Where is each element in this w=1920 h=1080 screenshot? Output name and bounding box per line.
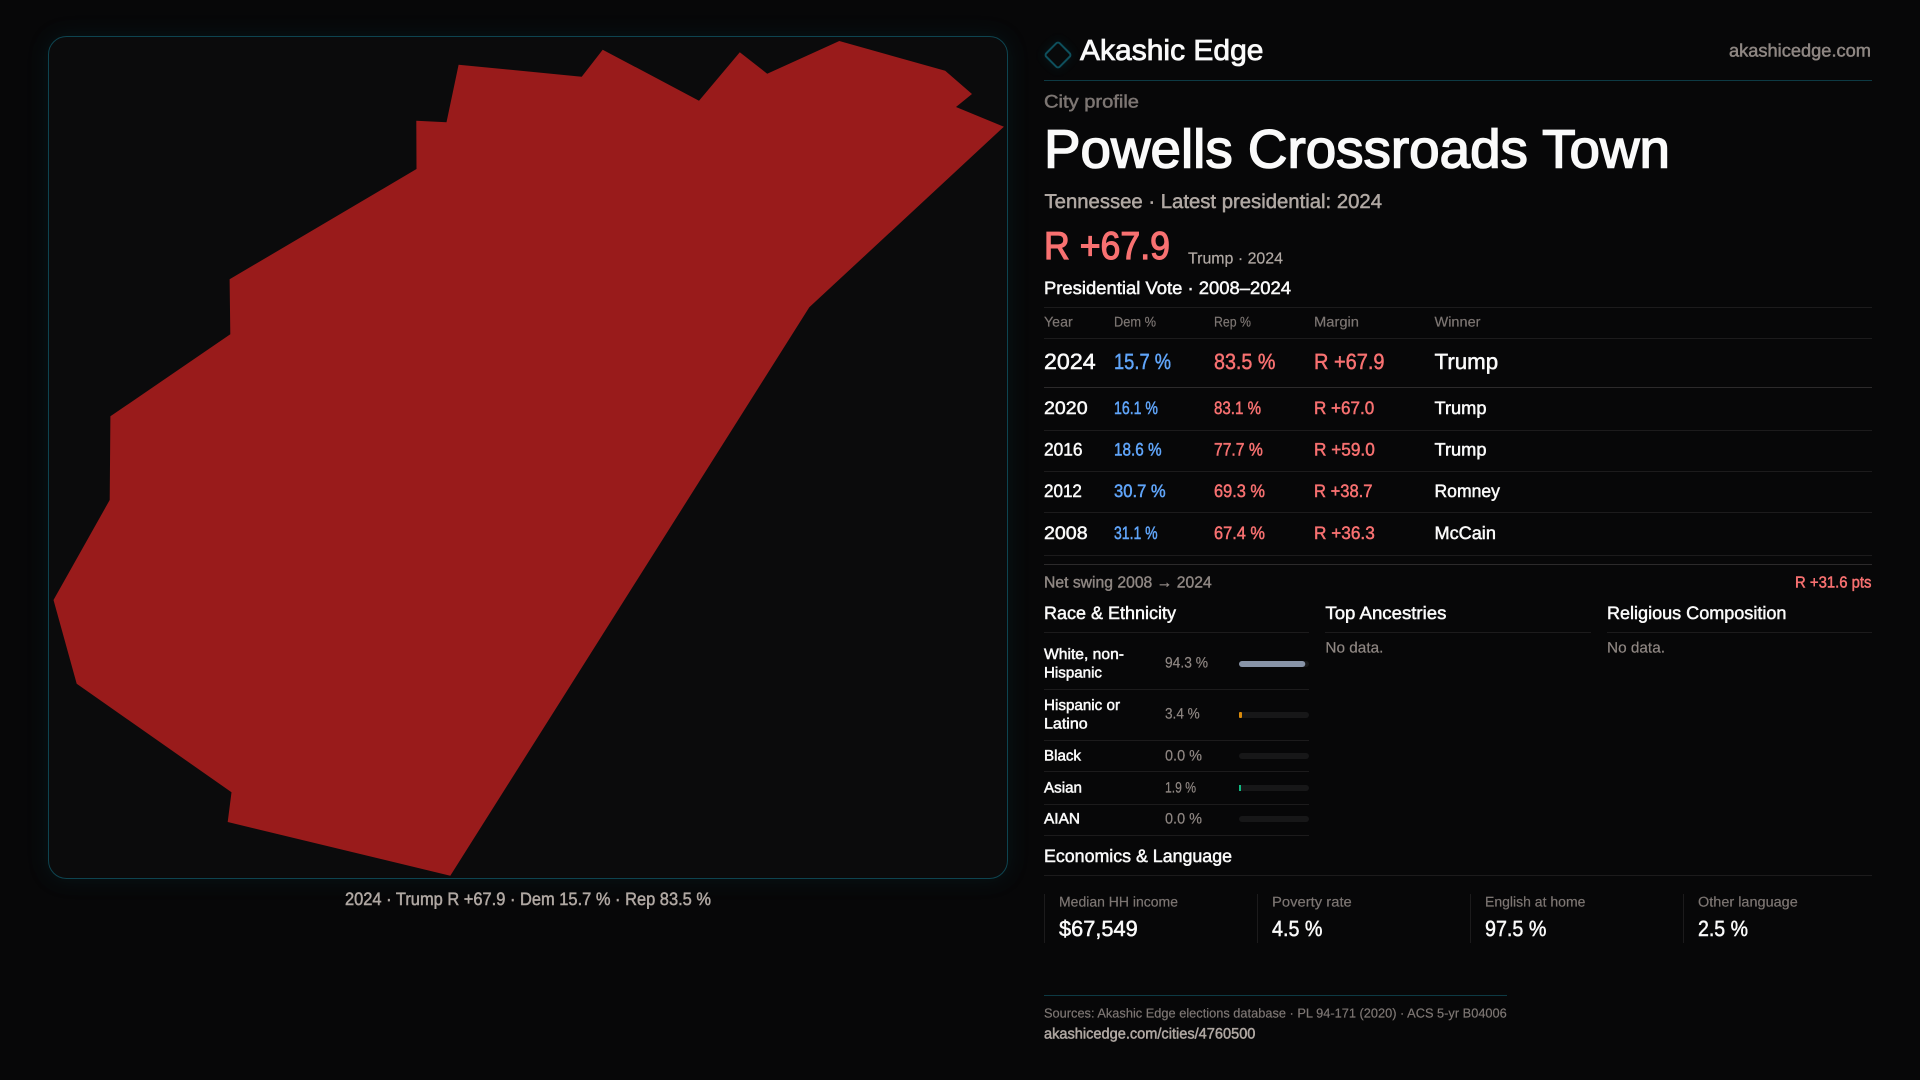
row 2024 bbox=[1044, 349, 1498, 374]
row 2024: 2024 bbox=[1044, 349, 1096, 374]
row 2008: 31.1 % bbox=[1114, 523, 1158, 543]
footer bbox=[1044, 996, 1507, 1042]
header bbox=[1044, 35, 1872, 80]
row 2024: 15.7 % bbox=[1114, 349, 1171, 374]
row 2012: R +38.7 bbox=[1314, 481, 1372, 501]
page url: akashicedge.com/cities/4760500 bbox=[1044, 1026, 1255, 1042]
icon: brand diamond bbox=[1044, 41, 1072, 69]
subtitle: Tennessee · Latest presidential: 2024 bbox=[1044, 191, 1382, 213]
table header bbox=[1044, 314, 1481, 330]
row: asian bbox=[1044, 780, 1309, 796]
row 2016: R +59.0 bbox=[1314, 440, 1375, 460]
panel: top ancestries bbox=[1325, 603, 1591, 656]
row: hispanic or latino: 3.4 % bbox=[1165, 706, 1200, 722]
row 2008: 2008 bbox=[1044, 523, 1088, 543]
row 2012 bbox=[1044, 481, 1500, 501]
row 2020 bbox=[1044, 398, 1486, 418]
panel: religious composition bbox=[1607, 603, 1872, 656]
net swing: R +31.6 pts bbox=[1795, 574, 1872, 592]
panel: map bbox=[48, 36, 1008, 879]
stat: other language bbox=[1684, 894, 1798, 943]
heading: top ancestries: Top Ancestries bbox=[1325, 603, 1446, 623]
eyebrow: City profile bbox=[1044, 92, 1139, 112]
row: white non-hispanic: 94.3 % bbox=[1165, 654, 1208, 672]
row 2016: 2016 bbox=[1044, 440, 1082, 460]
row 2020: 83.1 % bbox=[1214, 398, 1261, 418]
stat: english at home: English at home bbox=[1485, 894, 1586, 910]
net swing bbox=[1044, 574, 1872, 592]
row: hispanic or latino: Hispanic or bbox=[1044, 697, 1120, 714]
row 2008: McCain bbox=[1434, 523, 1496, 543]
row 2020: 2020 bbox=[1044, 398, 1088, 418]
row 2024: Trump bbox=[1434, 349, 1498, 374]
row: aian bbox=[1044, 810, 1309, 828]
stat: median income: Median HH income bbox=[1059, 894, 1178, 910]
row 2020: Trump bbox=[1434, 398, 1486, 418]
row: white non-hispanic bbox=[1044, 646, 1309, 682]
headline margin note: Trump · 2024 bbox=[1188, 250, 1283, 268]
brand name: Akashic Edge bbox=[1080, 35, 1264, 67]
table header: Year bbox=[1044, 314, 1073, 330]
row: aian: AIAN bbox=[1044, 810, 1080, 828]
row 2016: 18.6 % bbox=[1114, 440, 1162, 460]
map: city boundary shape bbox=[54, 41, 1004, 876]
site url: akashicedge.com bbox=[1729, 40, 1871, 60]
panel: economics and language bbox=[1044, 846, 1872, 943]
row: asian: 1.9 % bbox=[1165, 780, 1196, 796]
stat: poverty rate: 4.5 % bbox=[1272, 916, 1322, 941]
row 2016: Trump bbox=[1434, 440, 1486, 460]
row 2016: 77.7 % bbox=[1214, 440, 1263, 460]
row: black: Black bbox=[1044, 748, 1081, 764]
net swing: Net swing 2008 → 2024 bbox=[1044, 574, 1212, 592]
map caption: 2024 · Trump R +67.9 · Dem 15.7 % · Rep 83.5 % bbox=[345, 889, 711, 909]
row: aian: 0.0 % bbox=[1165, 810, 1202, 828]
row 2020: 16.1 % bbox=[1114, 398, 1158, 418]
row: asian: Asian bbox=[1044, 780, 1082, 796]
sources: Sources: Akashic Edge elections database · PL 94-171 (2020) · ACS 5-yr B04006 bbox=[1044, 1006, 1507, 1020]
heading: economics and language: Economics & Language bbox=[1044, 846, 1232, 866]
row: white non-hispanic: Hispanic bbox=[1044, 664, 1102, 682]
heading: race and ethnicity: Race & Ethnicity bbox=[1044, 603, 1176, 623]
table header: Margin bbox=[1314, 314, 1359, 330]
no data note: No data. bbox=[1607, 640, 1665, 656]
row 2024: 83.5 % bbox=[1214, 349, 1275, 374]
row 2008 bbox=[1044, 523, 1496, 543]
headline margin bbox=[1044, 225, 1283, 268]
section heading: presidential vote: Presidential Vote · 2008–2024 bbox=[1044, 278, 1291, 298]
table header: Winner bbox=[1434, 314, 1481, 330]
stat: other language: 2.5 % bbox=[1698, 916, 1748, 941]
no data note: No data. bbox=[1325, 640, 1383, 656]
row 2008: 67.4 % bbox=[1214, 523, 1265, 543]
row: black bbox=[1044, 748, 1309, 764]
headline margin: R +67.9 bbox=[1044, 225, 1170, 268]
table: presidential vote bbox=[1044, 314, 1872, 556]
row: hispanic or latino bbox=[1044, 697, 1309, 732]
stat: other language: Other language bbox=[1698, 894, 1798, 910]
row 2012: 30.7 % bbox=[1114, 481, 1166, 501]
row: black: 0.0 % bbox=[1165, 748, 1202, 764]
row 2008: R +36.3 bbox=[1314, 523, 1375, 543]
row 2012: 2012 bbox=[1044, 481, 1082, 501]
row 2012: Romney bbox=[1434, 481, 1500, 501]
row 2020: R +67.0 bbox=[1314, 398, 1374, 418]
stat: median income: $67,549 bbox=[1059, 916, 1138, 941]
panel: race and ethnicity bbox=[1044, 603, 1309, 836]
stat: english at home bbox=[1470, 894, 1586, 943]
row: white non-hispanic: White, non- bbox=[1044, 646, 1124, 663]
title: Powells Crossroads Town bbox=[1044, 120, 1670, 180]
table header: Rep % bbox=[1214, 314, 1251, 330]
row 2024: R +67.9 bbox=[1314, 349, 1384, 374]
stat: poverty rate: Poverty rate bbox=[1272, 894, 1352, 910]
row: hispanic or latino: Latino bbox=[1044, 716, 1088, 732]
stat: poverty rate bbox=[1258, 894, 1352, 943]
stat: median income bbox=[1044, 894, 1178, 943]
table header: Dem % bbox=[1114, 314, 1156, 330]
stat: english at home: 97.5 % bbox=[1485, 916, 1546, 941]
row 2016 bbox=[1044, 440, 1486, 460]
row 2012: 69.3 % bbox=[1214, 481, 1265, 501]
heading: religious composition: Religious Composition bbox=[1607, 603, 1786, 623]
